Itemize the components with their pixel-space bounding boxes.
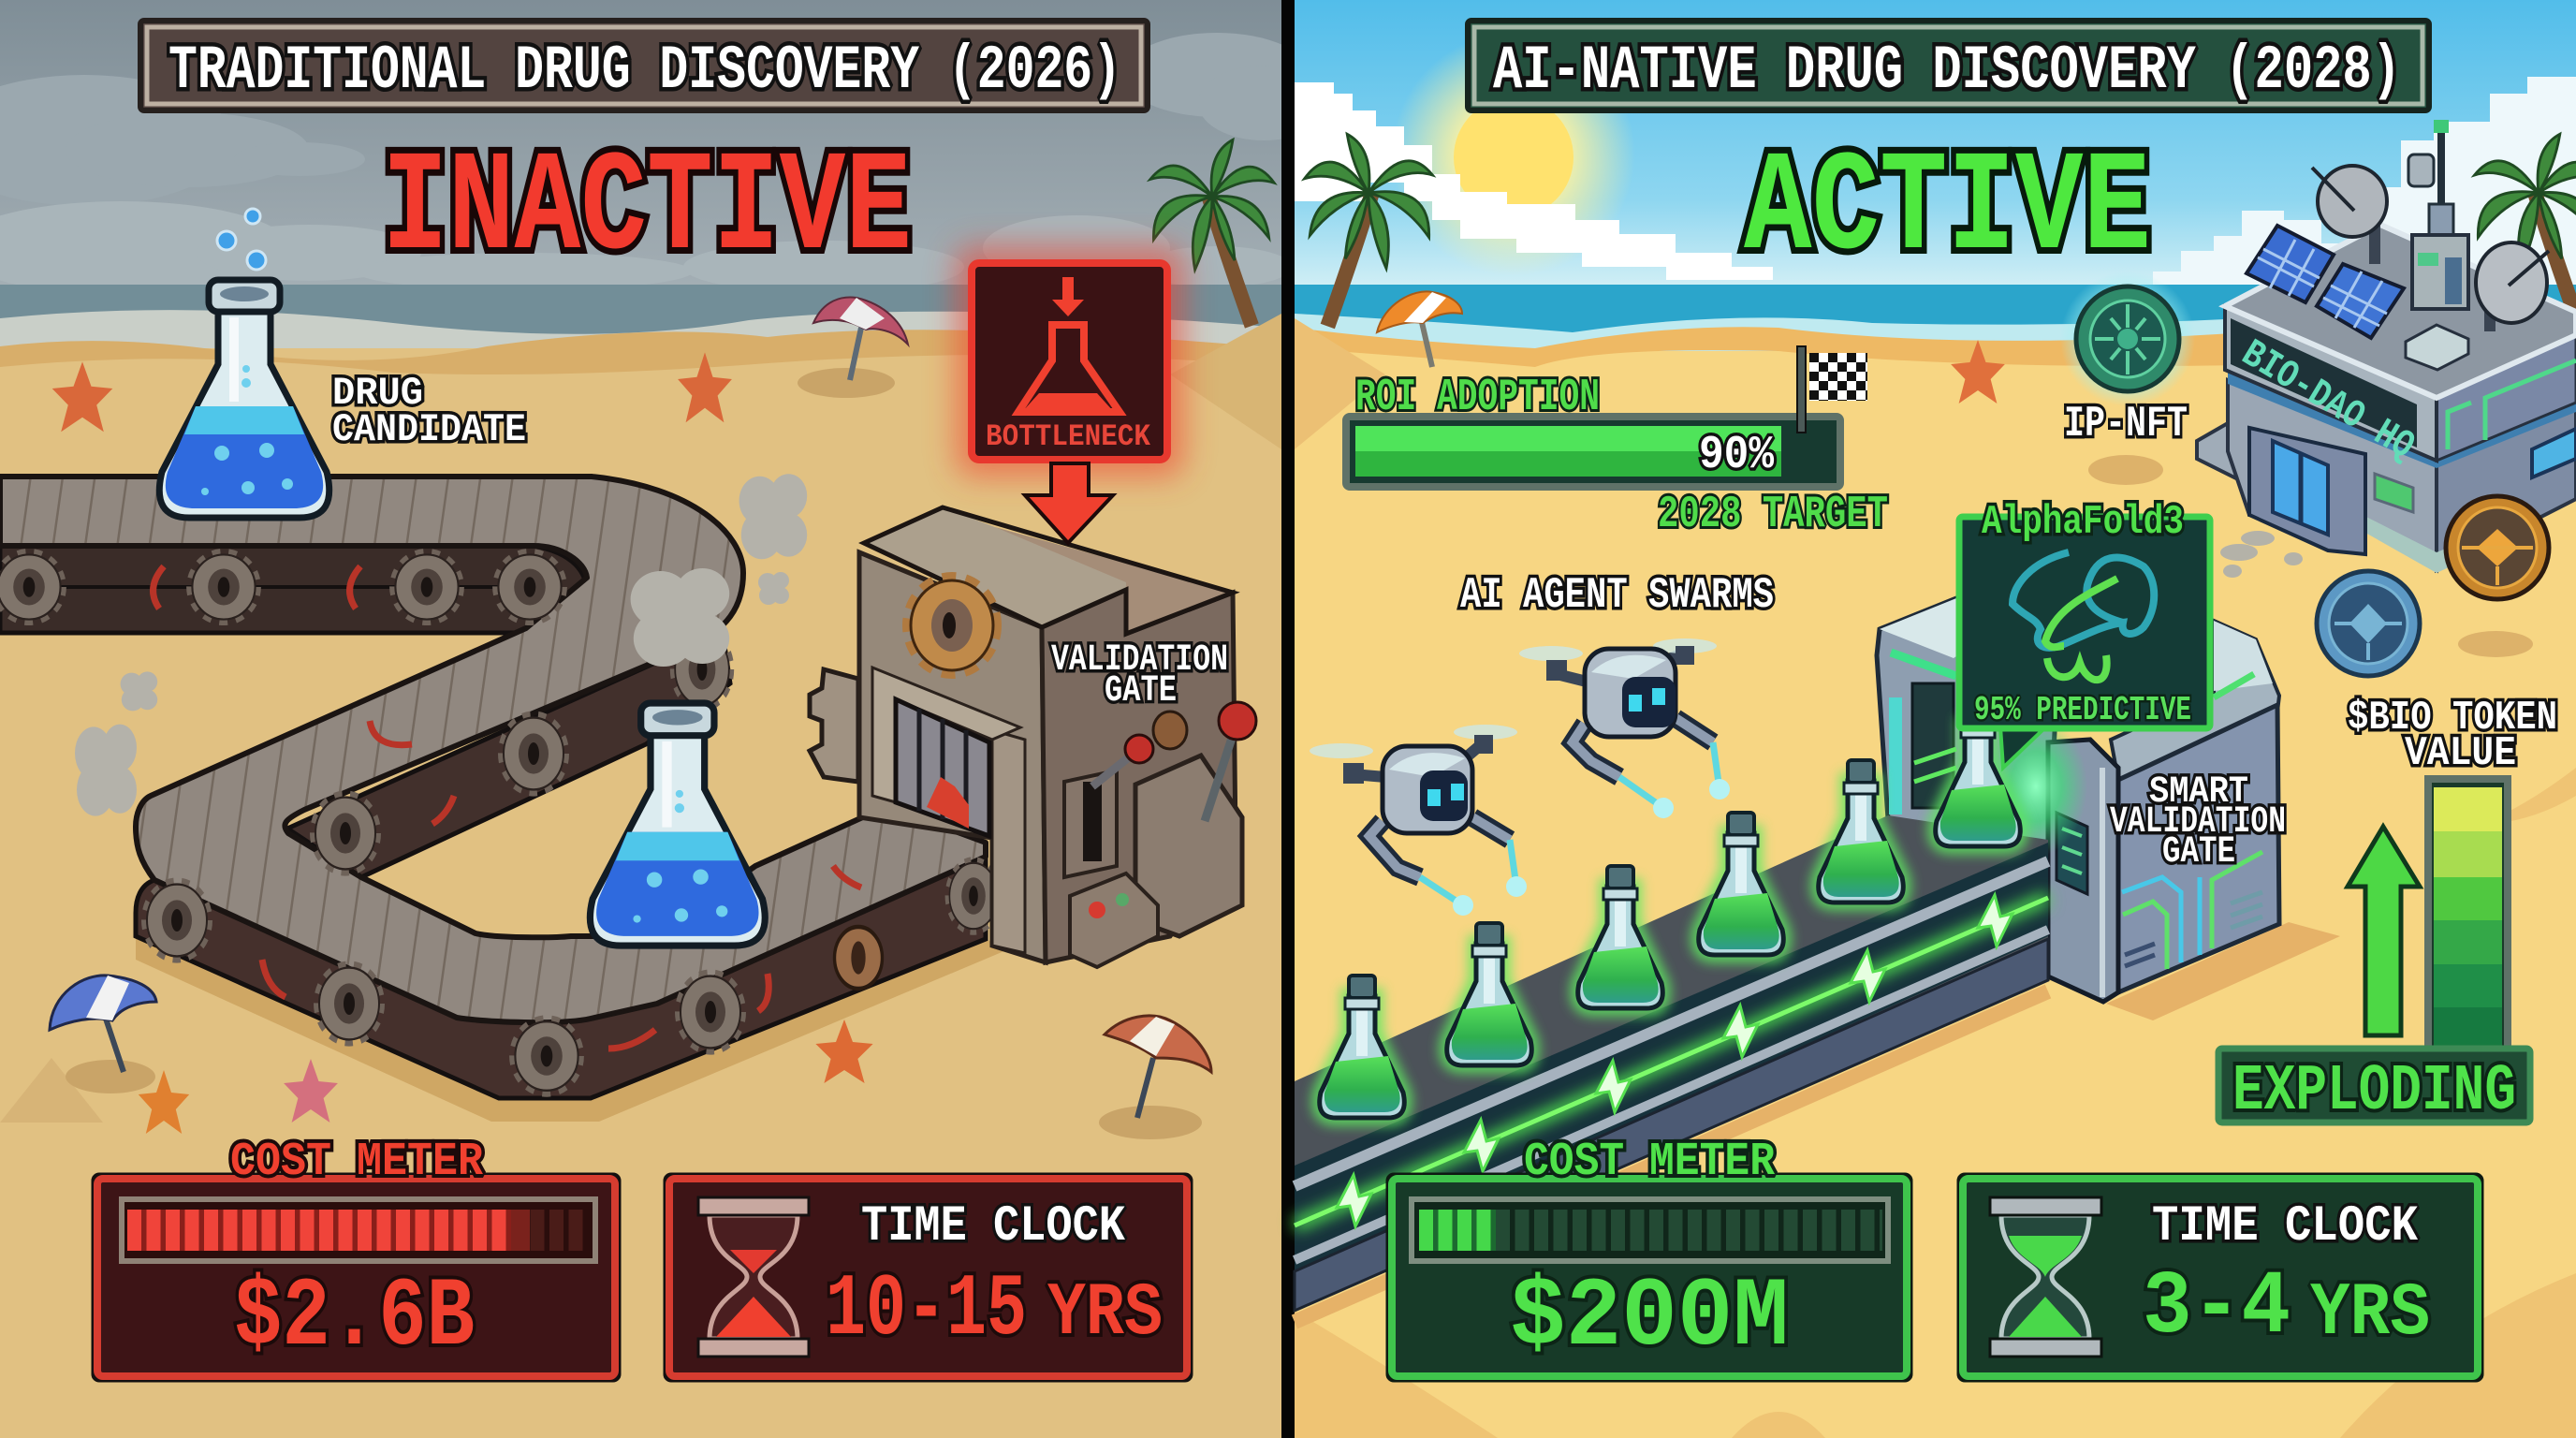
- smoke puffs: [75, 474, 807, 816]
- lower walls: [2228, 380, 2437, 570]
- AlphaFold3 callout: 95% PREDICTIVE: [1974, 691, 2191, 729]
- background: stormy beach: [0, 0, 1329, 1438]
- icon: beach umbrella top: [798, 298, 908, 398]
- icon: beach umbrella lower left: [50, 976, 156, 1093]
- arrow: value rising: [2348, 827, 2420, 1035]
- icon: blue coin: [2317, 571, 2533, 676]
- icon: checkered flag: [1797, 346, 1867, 433]
- rooftop module: [2406, 325, 2468, 370]
- plinth: [2359, 513, 2471, 573]
- conveyor belt: [1295, 815, 2048, 1322]
- icon: starfish: [52, 361, 112, 432]
- in-transit flask: [590, 703, 765, 946]
- drone: agent A: [1519, 638, 1730, 818]
- panel: cost meter: [94, 1175, 619, 1380]
- icon: beach umbrella lower right: [1099, 1016, 1211, 1139]
- satellite dishes: [2312, 166, 2549, 331]
- lever housing: [1135, 756, 1242, 936]
- ROI adoption gauge: ROI ADOPTION: [1355, 373, 1600, 423]
- starfish group: [139, 1020, 873, 1134]
- gate opening: [872, 668, 1020, 802]
- label: drug candidate: [332, 371, 526, 452]
- label: drug candidate: DRUG: [332, 371, 423, 416]
- roof top: [2225, 225, 2576, 398]
- heading: inactive: INACTIVE: [382, 128, 912, 290]
- icon: hourglass: [1990, 1197, 2101, 1357]
- right block back: [2111, 621, 2279, 780]
- label: drug candidate: CANDIDATE: [332, 407, 526, 452]
- arrow: bottleneck to gate: [1025, 463, 1113, 543]
- panel: time clock: [1959, 1175, 2481, 1380]
- panel: cost meter: [1388, 1175, 1910, 1380]
- sign text: BIO-DAO HQ: [2233, 331, 2422, 469]
- icon: IP-NFT coin: [2060, 271, 2195, 485]
- label: smart validation gate: GATE: [2162, 831, 2235, 873]
- icon: palm tree left: [1305, 134, 1432, 326]
- icon: small down arrow: [1052, 277, 1084, 316]
- label: smart validation gate: SMART: [2149, 771, 2248, 814]
- panel: traditional drug discovery (left): [0, 0, 1329, 1438]
- label: IP-NFT: IP-NFT: [2064, 400, 2188, 448]
- ROI adoption gauge: 90%: [1699, 429, 1775, 482]
- conveyor belt: [0, 477, 1006, 1122]
- icon: gold coin: [2446, 496, 2549, 599]
- meter bar: [1412, 1199, 1888, 1261]
- red wear marks: [154, 566, 861, 1049]
- icon: starfish: [678, 352, 732, 422]
- right window: [2532, 429, 2576, 477]
- panel: time clock: [666, 1175, 1191, 1380]
- callout: bottleneck: BOTTLENECK: [986, 419, 1151, 454]
- panel: time clock: 3-4: [2143, 1256, 2291, 1358]
- label: validation gate: GATE: [1105, 670, 1177, 712]
- panel: cost meter: $200M: [1510, 1263, 1789, 1373]
- green panel: [2375, 474, 2413, 512]
- belt side outer: [136, 857, 986, 1098]
- badge: exploding: EXPLODING: [2232, 1055, 2516, 1129]
- sign strip: [2225, 306, 2437, 461]
- stones: [2220, 531, 2303, 578]
- label: cost meter: COST METER: [230, 1136, 483, 1189]
- icon: bubbles: [217, 209, 266, 270]
- AlphaFold3 callout: AlphaFold3: [1982, 499, 2184, 546]
- slit panel: [1064, 770, 1117, 877]
- label: $BIO token value: VALUE: [2405, 730, 2516, 777]
- heading: active: ACTIVE: [1744, 128, 2151, 290]
- energy line: [1295, 898, 2048, 1225]
- belt side top: [0, 546, 587, 633]
- blue band: [2228, 370, 2576, 468]
- antenna: [2408, 120, 2468, 309]
- icon: hourglass: [698, 1197, 809, 1357]
- token value bar: [2428, 779, 2508, 1058]
- icon: palm tree right: [2475, 134, 2576, 326]
- icon: beach umbrella: [1377, 291, 1462, 367]
- label: $BIO token value: [2348, 695, 2557, 777]
- panel: time clock: 10-15: [826, 1261, 1027, 1360]
- label: validation gate: VALIDATION: [1051, 639, 1228, 682]
- sparks: [1337, 895, 2012, 1226]
- glow at gate: [1984, 716, 2087, 857]
- left block: [1877, 596, 2059, 866]
- panel: time clock: TIME CLOCK: [2152, 1198, 2419, 1255]
- right face: [2118, 705, 2279, 992]
- label: smart validation gate: [2110, 771, 2286, 873]
- belt top surface: [0, 477, 986, 1022]
- levers: [1092, 702, 1256, 821]
- door: [2249, 428, 2365, 554]
- panel: time clock: YRS: [2310, 1271, 2430, 1357]
- icon: protein fold: [2012, 552, 2154, 680]
- title plate: AI-native: [1468, 21, 2429, 110]
- callout: bottleneck: [955, 245, 1185, 477]
- side gear: [810, 669, 858, 782]
- icon: starfish: [1951, 340, 2005, 404]
- drone: agent B: [1310, 725, 1527, 916]
- label: AI agent swarms: AI AGENT SWARMS: [1460, 571, 1774, 620]
- control box: [1070, 873, 1158, 967]
- panel: time clock: TIME CLOCK: [861, 1198, 1126, 1255]
- gears: [0, 553, 998, 1092]
- screen: [2056, 813, 2087, 894]
- smart validation gate: [1877, 596, 2340, 1020]
- icon: flask: [1018, 325, 1120, 412]
- rusty gear: [909, 579, 995, 672]
- title plate: traditional: [140, 21, 1148, 110]
- validation gate machine: [810, 507, 1256, 967]
- belt side diagonal: [287, 633, 730, 877]
- AlphaFold3 callout: [1959, 499, 2210, 768]
- ROI adoption gauge: 2028 TARGET: [1658, 490, 1888, 540]
- icon: palm tree: [1150, 139, 1274, 326]
- label: validation gate: [1051, 639, 1228, 712]
- circuit traces: [2122, 852, 2262, 969]
- background: sunny beach: [1295, 0, 2576, 1438]
- meter bar: [122, 1199, 595, 1261]
- front tower: [2048, 740, 2118, 1002]
- green flasks: [1320, 704, 2020, 1118]
- title plate: traditional: TRADITIONAL DRUG DISCOVERY (2026): [168, 36, 1121, 106]
- Bio-DAO HQ building: [2197, 120, 2576, 578]
- panel: AI-native drug discovery (right): [1295, 0, 2576, 1438]
- divider: [1281, 0, 1295, 1438]
- ROI adoption gauge: [1346, 346, 1888, 540]
- planter: [2197, 423, 2249, 485]
- label: cost meter: COST METER: [1524, 1136, 1775, 1189]
- drug candidate flask: [159, 280, 329, 518]
- panel: cost meter: $2.6B: [234, 1263, 475, 1373]
- panel: time clock: YRS: [1047, 1271, 1163, 1357]
- solar panels: [2247, 226, 2404, 338]
- label: smart validation gate: VALIDATION: [2110, 801, 2286, 844]
- fascia right: [2437, 335, 2576, 461]
